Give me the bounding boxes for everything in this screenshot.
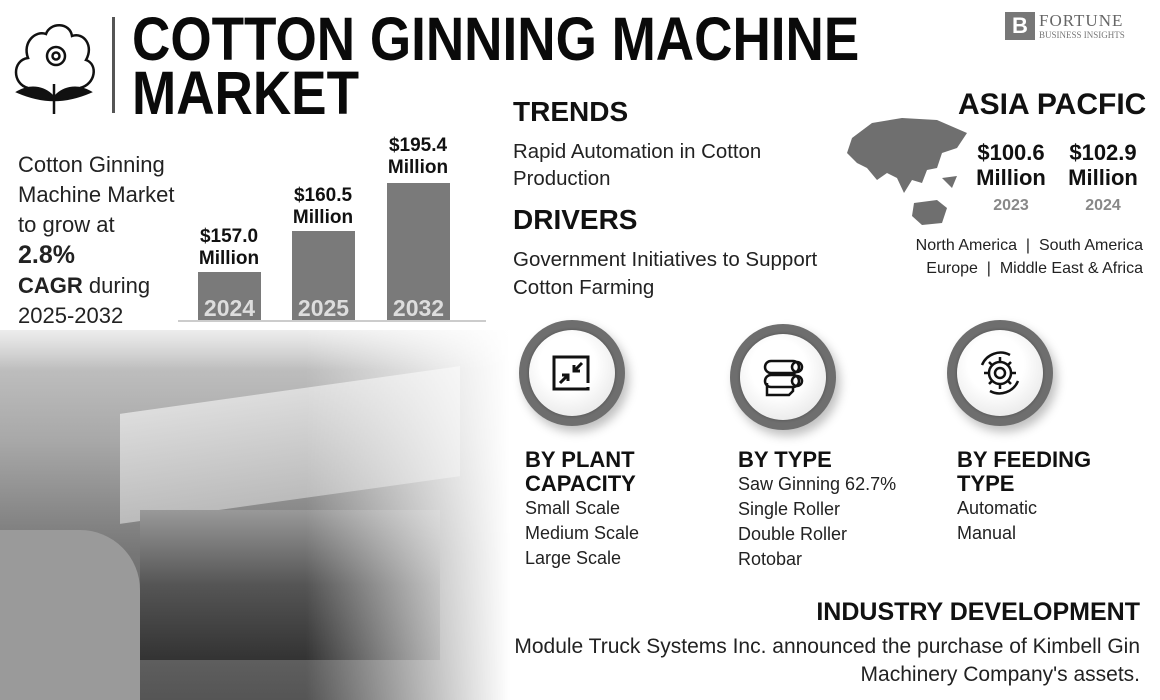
text: drivers: Government Initiatives to Support <box>513 248 817 271</box>
segment: plant capacity: Large Scale <box>525 548 621 568</box>
text: industry development: Module Truck Systems Inc. announced the purchase of Kimbell Gin <box>514 635 1140 658</box>
segment: type: Saw Ginning 62.7% <box>738 474 896 494</box>
logo: fortune business insights: B <box>1012 13 1028 38</box>
segment: plant capacity: CAPACITY <box>525 471 636 496</box>
text: CAGR summary: 2.8% <box>18 241 75 269</box>
stat: 2024: $102.9 <box>1069 140 1137 165</box>
segment: feeding type <box>957 447 1091 543</box>
bar chart: 2024 <box>204 295 255 321</box>
text: other regions: North America | South America <box>916 237 1143 254</box>
heading: drivers: DRIVERS <box>513 204 637 235</box>
bar chart: 2032 <box>393 295 444 321</box>
icon: plant capacity <box>519 320 625 426</box>
text: drivers: Cotton Farming <box>513 276 654 299</box>
stat: 2024 <box>1068 140 1138 214</box>
bar chart <box>178 135 486 322</box>
text: CAGR summary: to grow at <box>18 212 115 237</box>
logo: fortune business insights: FORTUNE <box>1039 11 1123 30</box>
text: CAGR summary <box>18 152 175 328</box>
segment: feeding type: BY FEEDING <box>957 447 1091 472</box>
segment: feeding type: TYPE <box>957 471 1014 496</box>
bar chart: $157.0 <box>200 226 258 247</box>
stat: 2023: $100.6 <box>977 140 1045 165</box>
text: CAGR summary: 2025-2032 <box>18 303 123 328</box>
text: CAGR summary: CAGR during <box>18 273 150 298</box>
divider <box>112 17 115 113</box>
bar chart: Million <box>293 207 353 228</box>
text: CAGR summary: Cotton Ginning <box>18 152 165 177</box>
text: industry development <box>514 635 1140 686</box>
stat: 2023: Million <box>976 165 1046 190</box>
segment: plant capacity <box>525 447 639 568</box>
title: MARKET <box>132 59 359 127</box>
heading: asia pacific: ASIA PACFIC <box>958 88 1146 121</box>
icon: feeding type gear <box>947 320 1053 426</box>
segment: plant capacity: BY PLANT <box>525 447 635 472</box>
segment: type <box>738 447 896 569</box>
bar chart: 2025 <box>298 295 349 321</box>
text: CAGR summary: Machine Market <box>18 182 175 207</box>
text: trends: Rapid Automation in Cotton <box>513 141 761 163</box>
text: trends <box>513 141 761 190</box>
segment: type: Single Roller <box>738 499 840 519</box>
icon: cotton logo <box>14 24 95 114</box>
stat: 2023 <box>976 140 1046 214</box>
photo: cotton ginning machine <box>0 330 510 700</box>
text: drivers <box>513 248 818 299</box>
segment: plant capacity: Medium Scale <box>525 523 639 543</box>
title: COTTON GINNING MACHINE <box>132 5 859 73</box>
segment: feeding type: Automatic <box>957 498 1037 518</box>
text: other regions: Europe | Middle East & Africa <box>926 260 1143 277</box>
stat: 2024: Million <box>1068 165 1138 190</box>
segment: type: Double Roller <box>738 524 847 544</box>
bar chart: Million <box>388 157 448 178</box>
text: trends: Production <box>513 168 610 190</box>
icon: type rollers <box>730 324 836 430</box>
stat: 2023: 2023 <box>993 197 1029 214</box>
map: asia pacific <box>847 118 967 225</box>
logo: fortune business insights: BUSINESS INSIGHTS <box>1039 30 1125 40</box>
logo: fortune business insights <box>1005 11 1125 40</box>
text: industry development: Machinery Company's assets. <box>861 663 1140 686</box>
bar chart: Million <box>199 248 259 269</box>
text: other regions <box>916 237 1144 277</box>
bar chart: $160.5 <box>294 185 352 206</box>
stat: 2024: 2024 <box>1085 197 1121 214</box>
bar chart: $195.4 <box>389 135 447 156</box>
heading: industry development: INDUSTRY DEVELOPMENT <box>816 598 1140 626</box>
heading: trends: TRENDS <box>513 96 628 127</box>
segment: feeding type: Manual <box>957 523 1016 543</box>
segment: type: Rotobar <box>738 549 802 569</box>
segment: type: BY TYPE <box>738 447 832 472</box>
title <box>132 5 859 127</box>
segment: plant capacity: Small Scale <box>525 498 620 518</box>
